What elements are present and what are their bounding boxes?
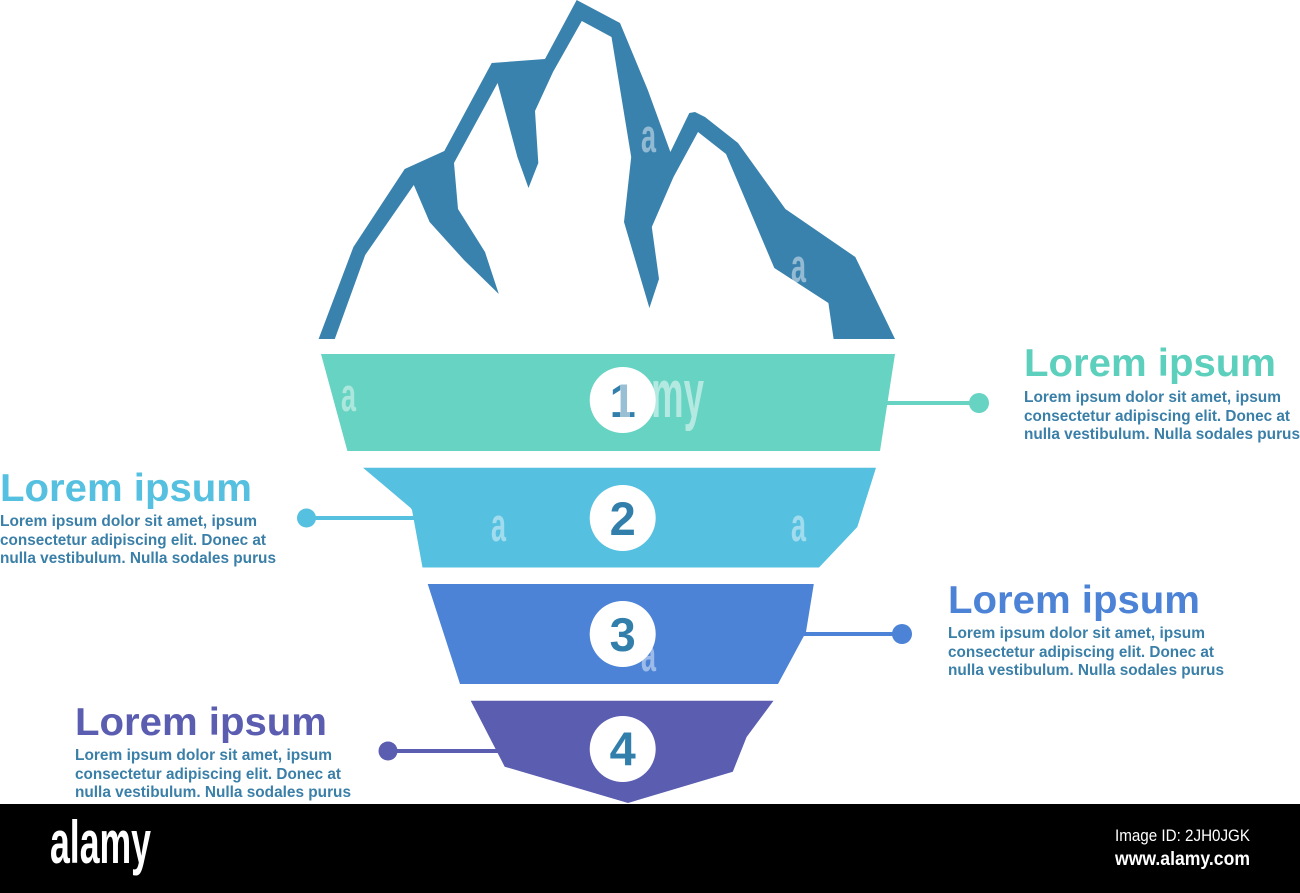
step 4: band, connector and number: 4: [610, 722, 636, 775]
text block 1: [1024, 342, 1300, 443]
text block 3: Lorem ipsum dolor sit amet, ipsum: [948, 625, 1205, 642]
step 3: band, connector and number: 3: [610, 608, 636, 661]
footer bar: www.alamy.com: [1114, 849, 1250, 870]
text block 2: [0, 467, 276, 567]
text block 2: consectetur adipiscing elit. Donec at: [0, 532, 266, 549]
text block 4: Lorem ipsum dolor sit amet, ipsum: [75, 747, 332, 764]
text block 2: Lorem ipsum dolor sit amet, ipsum: [0, 513, 257, 530]
text block 1: Lorem ipsum dolor sit amet, ipsum: [1024, 389, 1281, 406]
text block 1: consectetur adipiscing elit. Donec at: [1024, 408, 1290, 425]
text block 3: nulla vestibulum. Nulla sodales purus: [948, 662, 1224, 679]
watermark glyphs: [341, 109, 806, 681]
footer bar: [0, 804, 1300, 893]
step 2: band, connector and number: 2: [610, 492, 636, 545]
text block 1: nulla vestibulum. Nulla sodales purus: [1024, 426, 1300, 443]
text block 1: Lorem ipsum: [1024, 342, 1276, 385]
footer bar: alamy: [50, 809, 151, 876]
step 1: band, connector and number: 1: [610, 374, 636, 427]
step 4: band, connector and number: [378, 701, 774, 803]
text block 3: [948, 579, 1224, 679]
step 2: band, connector and number: [297, 468, 876, 568]
text block 2: Lorem ipsum: [0, 467, 252, 510]
iceberg tip above water: [319, 0, 895, 339]
text block 4: [75, 701, 351, 801]
text block 3: consectetur adipiscing elit. Donec at: [948, 644, 1214, 661]
watermark glyphs: a: [641, 628, 656, 681]
footer bar: Image ID: 2JH0JGK: [1115, 826, 1251, 845]
step 3: band, connector and number: [428, 584, 912, 684]
text block 4: Lorem ipsum: [75, 701, 327, 744]
watermark glyphs: a: [491, 498, 506, 551]
step 1: band, connector and number: [321, 354, 989, 451]
text block 2: nulla vestibulum. Nulla sodales purus: [0, 550, 276, 567]
text block 4: nulla vestibulum. Nulla sodales purus: [75, 784, 351, 801]
watermark glyphs: a: [641, 109, 656, 162]
text block 3: Lorem ipsum: [948, 579, 1200, 622]
watermark glyphs: a: [791, 498, 806, 551]
watermark glyphs: my: [651, 356, 704, 432]
watermark glyphs: a: [791, 239, 806, 292]
text block 4: consectetur adipiscing elit. Donec at: [75, 766, 341, 783]
watermark glyphs: a: [341, 368, 356, 421]
